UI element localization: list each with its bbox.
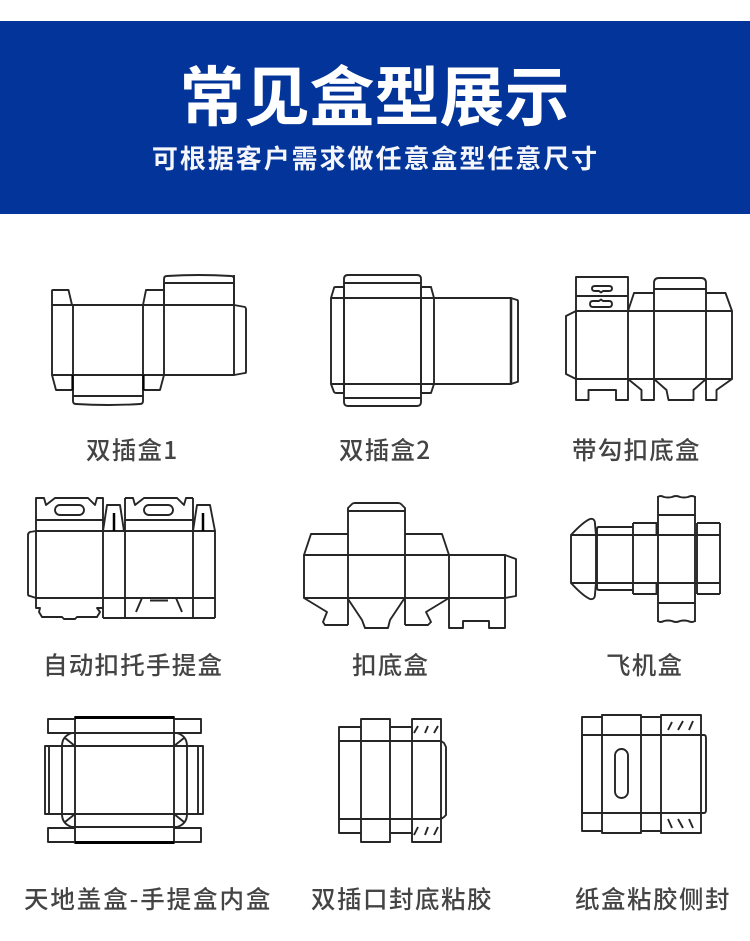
- label: 带勾扣底盒: 带勾扣底盒: [572, 432, 701, 467]
- label: 双插盒1: 双插盒1: [86, 432, 178, 467]
- panel: 飞机盒: [571, 496, 720, 682]
- label: 双插口封底粘胶: 双插口封底粘胶: [311, 881, 493, 916]
- diagram: 双插盒1 dieline: [52, 275, 246, 405]
- label: 扣底盒: 扣底盒: [352, 647, 429, 682]
- panel: 纸盒粘胶侧封: [575, 715, 731, 916]
- header banner: [0, 21, 750, 214]
- panel: 天地盖盒-手提盒内盒: [24, 717, 272, 916]
- diagram: 双插口封底粘胶 dieline: [339, 719, 446, 842]
- panel: 自动扣托手提盒: [28, 498, 223, 682]
- title: 常见盒型展示: [179, 45, 570, 139]
- diagram: 扣底盒 dieline: [304, 503, 516, 628]
- panel: 带勾扣底盒: [566, 277, 732, 467]
- diagram: 天地盖盒 dieline: [45, 717, 203, 843]
- diagram: 双插盒2 dieline: [331, 275, 518, 406]
- label: 自动扣托手提盒: 自动扣托手提盒: [43, 647, 223, 682]
- diagram: 自动扣托手提盒 dieline: [28, 498, 215, 619]
- panel: 扣底盒: [304, 503, 516, 682]
- panel: 双插盒1: [52, 275, 246, 467]
- label: 天地盖盒-手提盒内盒: 天地盖盒-手提盒内盒: [24, 881, 272, 916]
- diagram: 带勾扣底盒 dieline: [566, 277, 732, 400]
- panel: 双插盒2: [331, 275, 518, 467]
- panel: 双插口封底粘胶: [311, 719, 493, 916]
- label: 纸盒粘胶侧封: 纸盒粘胶侧封: [575, 881, 731, 916]
- label: 飞机盒: 飞机盒: [606, 647, 683, 682]
- diagram: 纸盒粘胶侧封 dieline: [582, 715, 706, 833]
- label: 双插盒2: 双插盒2: [339, 432, 431, 467]
- diagram: 飞机盒 dieline: [571, 496, 720, 622]
- subtitle: 可根据客户需求做任意盒型任意尺寸: [152, 139, 599, 176]
